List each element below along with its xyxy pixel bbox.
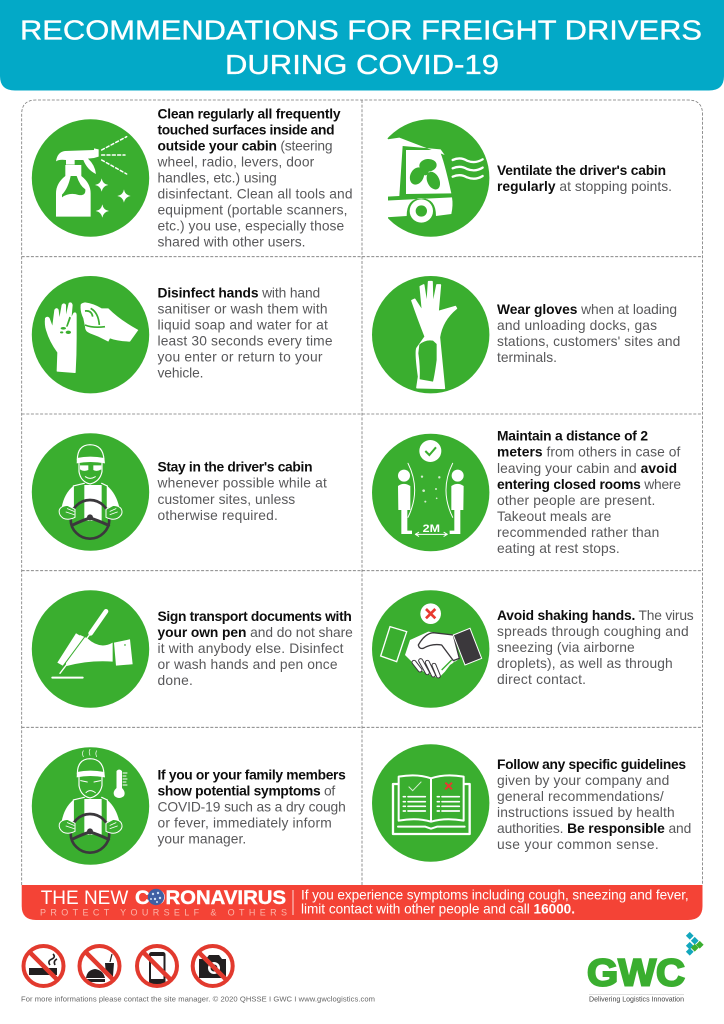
text: symptoms: or fever, immediately inform [158, 815, 332, 830]
text: avoid handshakes: Avoid shaking hands. The virus [497, 608, 694, 623]
icon: virus ball [148, 889, 164, 905]
text: clean surfaces: touched surfaces inside and [158, 122, 334, 137]
text: disinfect hands: least 30 seconds every time [158, 333, 333, 348]
text: ventilate cabin [497, 163, 672, 194]
logo tagline: Delivering Logistics Innovation [589, 994, 684, 1004]
icon: sick driver with thermometer [32, 747, 149, 865]
icon: no phone [137, 946, 177, 986]
text: own pen: Sign transport documents with [158, 609, 352, 624]
logo mark: diamonds [686, 932, 704, 956]
banner tagline: PROTECT YOURSELF & OTHERS [40, 907, 287, 917]
panel: ventilate cabin [364, 119, 672, 237]
panel: symptoms [32, 747, 346, 865]
text: stay in cabin: customer sites, unless [158, 492, 295, 507]
text: own pen [158, 609, 353, 688]
text: ventilate cabin: regularly at stopping points. [497, 179, 672, 194]
panel: keep distance [372, 429, 681, 556]
text: symptoms [158, 767, 346, 846]
icon: open book [372, 744, 489, 862]
panel: stay in cabin [32, 433, 327, 551]
text: clean surfaces: disinfectant. Clean all tools and [158, 186, 352, 202]
icon: two people two metres apart [372, 434, 489, 551]
text: clean surfaces: wheel, radio, levers, door [156, 154, 315, 169]
text: avoid handshakes [497, 608, 694, 687]
text: stay in cabin [156, 460, 327, 523]
GWC logo [587, 932, 704, 1004]
title [20, 14, 702, 80]
text: keep distance: other people are present. [497, 493, 655, 508]
text: clean surfaces: shared with other users. [158, 235, 306, 250]
panel: wear gloves [372, 276, 680, 393]
icon: hands with sanitiser [32, 276, 149, 393]
text: stay in cabin: whenever possible while at [156, 476, 327, 491]
text: disinfect hands: Disinfect hands with hand [158, 285, 320, 300]
text: symptoms: If you or your family members [158, 767, 346, 782]
text: disinfect hands: you enter or return to your [158, 350, 323, 364]
text: avoid handshakes: direct contact. [497, 672, 586, 687]
text: clean surfaces: etc.) you use, especially those [158, 219, 345, 234]
text: own pen: your own pen and do not share [158, 625, 353, 640]
panel: follow guidelines [372, 744, 691, 862]
text: disinfect hands: liquid soap and water for at [158, 317, 328, 332]
red coronavirus banner [22, 885, 702, 920]
icon: two people two metres apart: 2M [423, 523, 440, 535]
text: follow guidelines: given by your company and [497, 773, 669, 788]
text: own pen: done. [158, 673, 193, 688]
text: avoid handshakes: sneezing (via airborne [497, 640, 635, 655]
banner message: limit contact with other people and call 16000. [301, 902, 575, 916]
text: clean surfaces [156, 106, 352, 250]
text: symptoms: show potential symptoms of [158, 783, 335, 798]
text: keep distance: eating at rest stops. [497, 541, 620, 556]
icon: hand signing with pen [32, 590, 149, 708]
text: own pen: or wash hands and pen once [158, 657, 338, 672]
text: wear gloves: and unloading docks, gas [497, 318, 657, 333]
text: keep distance: recommended rather than [497, 525, 659, 540]
text: clean surfaces: Clean regularly all frequently [158, 106, 341, 121]
text: follow guidelines: use your common sense. [497, 837, 659, 852]
text: disinfect hands: sanitiser or wash them with [158, 301, 328, 316]
text: stay in cabin: otherwise required. [158, 508, 278, 523]
text: symptoms: COVID-19 such as a dry cough [158, 799, 346, 814]
text: follow guidelines [497, 757, 691, 852]
text: keep distance: Takeout meals are [497, 509, 612, 524]
text: disinfect hands: vehicle. [158, 366, 204, 380]
panel: avoid handshakes [372, 590, 694, 708]
title: RECOMMENDATIONS FOR FREIGHT DRIVERS [20, 14, 702, 46]
text: avoid handshakes: spreads through coughing and [497, 624, 689, 639]
icon: no smoking [24, 946, 64, 986]
text: clean surfaces: handles, etc.) using [158, 170, 277, 186]
text: keep distance [497, 429, 681, 556]
header banner [0, 0, 724, 90]
panel: own pen [32, 590, 353, 708]
banner heading: THE NEW [41, 887, 129, 909]
banner heading: CORONAVIRUS [135, 887, 286, 909]
banner message: If you experience symptoms including cough, sneezing and fever, [301, 888, 689, 902]
logo wordmark: GWC [587, 952, 685, 994]
icon: spray bottle [32, 119, 149, 237]
text: clean surfaces: equipment (portable scanners, [158, 203, 348, 218]
icon: truck cabin with fan [364, 119, 489, 237]
text: keep distance: Maintain a distance of 2 [497, 429, 648, 444]
text: wear gloves: Wear gloves when at loading [497, 302, 677, 317]
text: avoid handshakes: droplets), as well as through [497, 656, 673, 671]
text: symptoms: your manager. [158, 832, 246, 846]
icon: driver at steering wheel [32, 433, 149, 551]
banner message [301, 888, 689, 916]
text: wear gloves [497, 302, 680, 365]
text: follow guidelines: general recommendations/ [497, 789, 664, 804]
text: own pen: it with anybody else. Disinfect [158, 641, 344, 656]
banner heading [41, 887, 286, 909]
icon: gloved hand [372, 276, 489, 393]
text: wear gloves: stations, customers' sites and [497, 334, 680, 349]
text: keep distance: meters from others in case of [497, 445, 680, 460]
icon: no camera [193, 946, 233, 986]
footer note: For more informations please contact the site manager. © 2020 QHSSE I GWC I www.gwclogistics.com [21, 995, 375, 1004]
text: disinfect hands [158, 285, 333, 380]
text: ventilate cabin: Ventilate the driver's cabin [497, 163, 666, 178]
text: keep distance: leaving your cabin and avoid [497, 461, 677, 476]
text: follow guidelines: authorities. Be responsible and [497, 821, 691, 836]
text: follow guidelines: instructions issued by health [497, 805, 675, 820]
panel: disinfect hands [32, 276, 333, 393]
text: wear gloves: terminals. [497, 350, 557, 365]
text: keep distance: entering closed rooms where [497, 477, 681, 492]
icon: no food or drink [80, 946, 120, 986]
panel: clean surfaces [32, 106, 353, 250]
text: clean surfaces: outside your cabin (steering [158, 138, 332, 153]
text: stay in cabin: Stay in the driver's cabin [158, 460, 312, 475]
title: DURING COVID-19 [225, 49, 499, 80]
text: follow guidelines: Follow any specific guidelines [497, 757, 686, 772]
icon: handshake with cross [372, 590, 489, 708]
